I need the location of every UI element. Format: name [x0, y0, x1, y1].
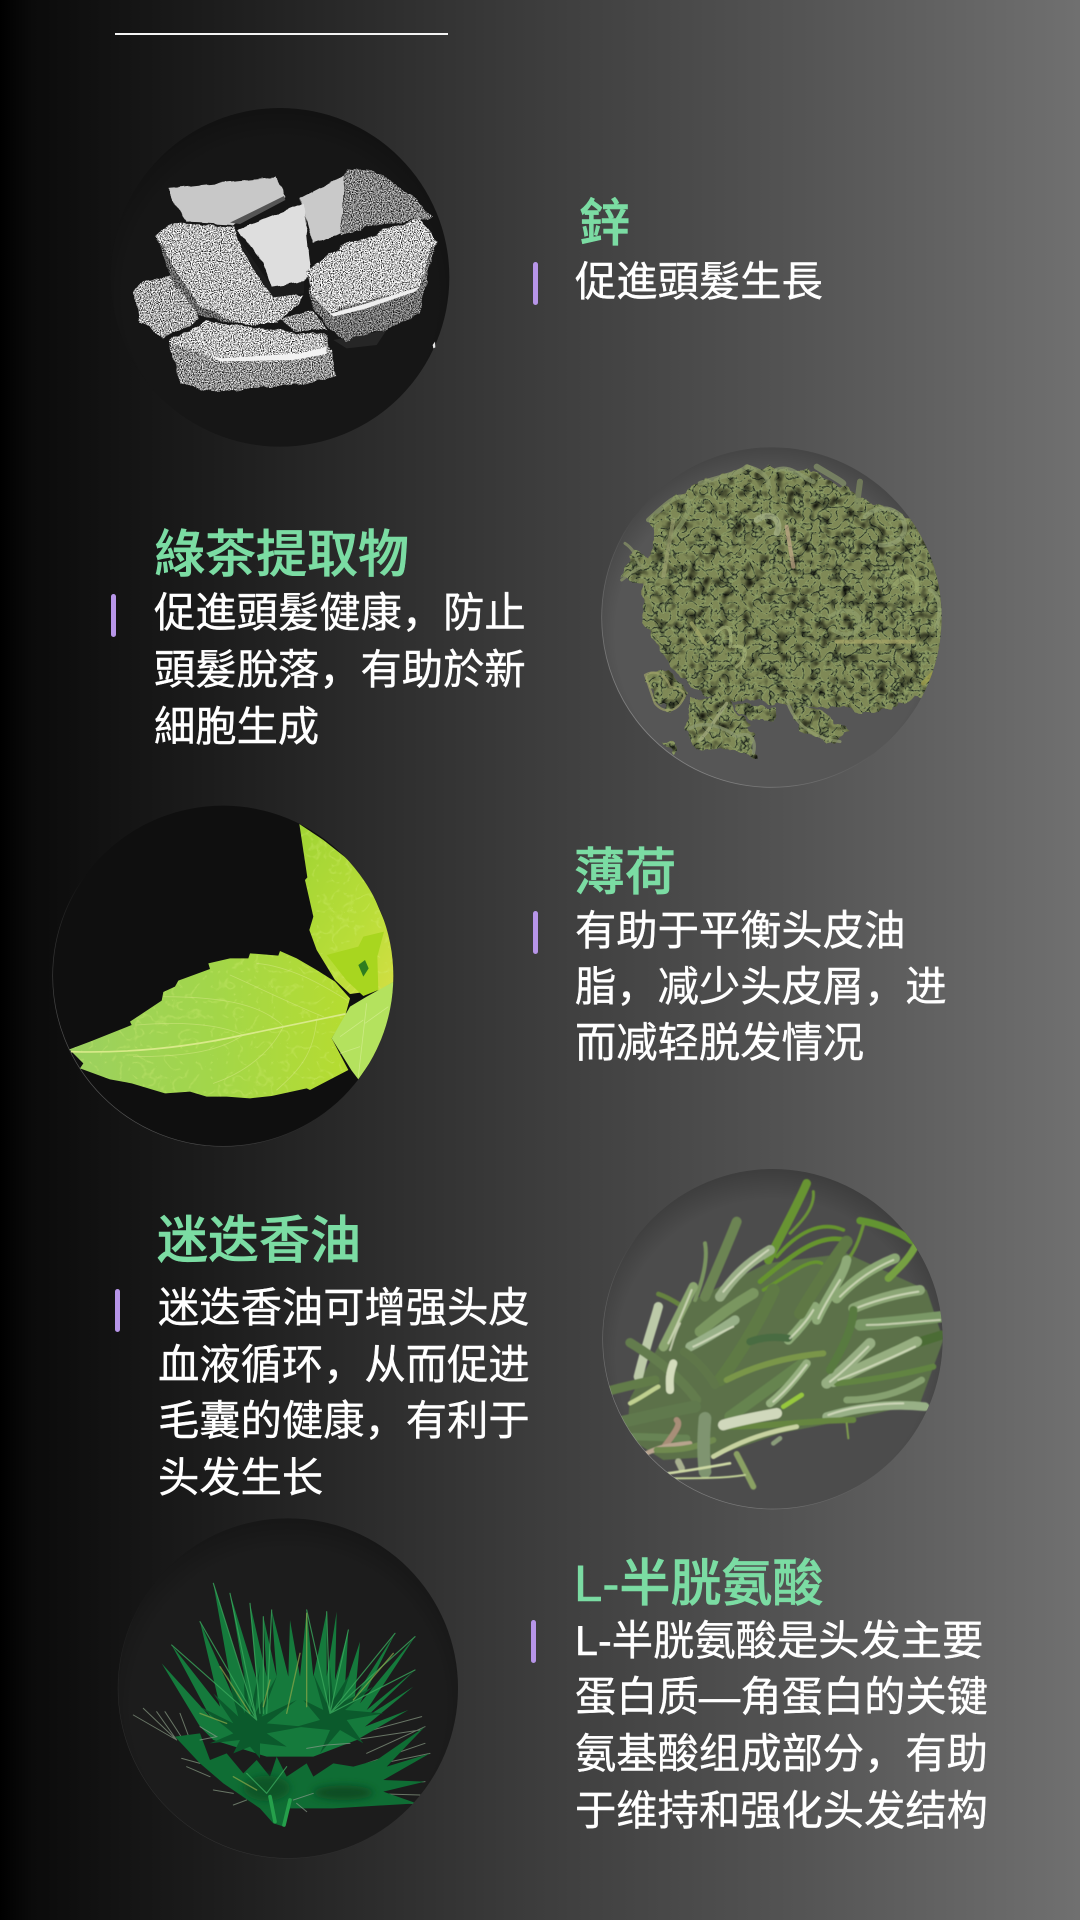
top divider line — [115, 33, 448, 35]
panel: mint text — [533, 844, 947, 1066]
description: 蛋白质—角蛋白的关键 — [575, 1674, 988, 1720]
panel: rosemary text — [115, 1212, 530, 1501]
description: 頭髮脫落，有助於新 — [154, 647, 526, 693]
icon: mint leaves in circle — [52, 806, 394, 1147]
heading: L-cysteine: L-半胱氨酸 — [574, 1555, 823, 1612]
icon: green tea leaves in circle — [601, 448, 942, 788]
description: 于维持和强化头发结构 — [575, 1788, 988, 1834]
description: 迷迭香油可增强头皮 — [158, 1285, 530, 1331]
description: 促進頭髮健康，防止 — [154, 590, 526, 636]
panel: green tea text — [111, 526, 526, 750]
accent bar — [111, 594, 116, 637]
description — [575, 908, 947, 1066]
accent bar — [533, 911, 538, 954]
description: L-半胱氨酸是头发主要 — [575, 1618, 983, 1664]
panel: zinc text — [533, 195, 823, 305]
description: 血液循环，从而促进 — [158, 1342, 530, 1388]
heading: zinc: 鋅 — [579, 195, 630, 252]
description: 有助于平衡头皮油 — [575, 908, 905, 954]
icon: green plant in circle — [118, 1518, 458, 1858]
description: 毛囊的健康，有利于 — [158, 1398, 530, 1444]
description — [154, 590, 526, 750]
icon: rosemary in circle — [602, 1169, 943, 1510]
icon: zinc metal pieces in circle — [132, 108, 450, 446]
accent bar — [531, 1620, 536, 1663]
description: 头发生长 — [158, 1455, 323, 1501]
description: 促進頭髮生長 — [575, 259, 823, 305]
description: 脂，减少头皮屑，进 — [575, 964, 947, 1010]
description: 氨基酸组成部分，有助 — [575, 1731, 988, 1777]
description: 細胞生成 — [154, 704, 319, 750]
accent bar — [115, 1289, 120, 1332]
description — [158, 1285, 530, 1501]
heading: mint: 薄荷 — [574, 844, 676, 901]
heading: green tea extract: 綠茶提取物 — [154, 526, 409, 583]
panel: L-cysteine text — [531, 1555, 988, 1834]
description — [575, 1618, 988, 1834]
description: 而减轻脱发情况 — [575, 1020, 864, 1066]
accent bar — [533, 262, 538, 305]
heading: rosemary oil: 迷迭香油 — [157, 1212, 361, 1269]
